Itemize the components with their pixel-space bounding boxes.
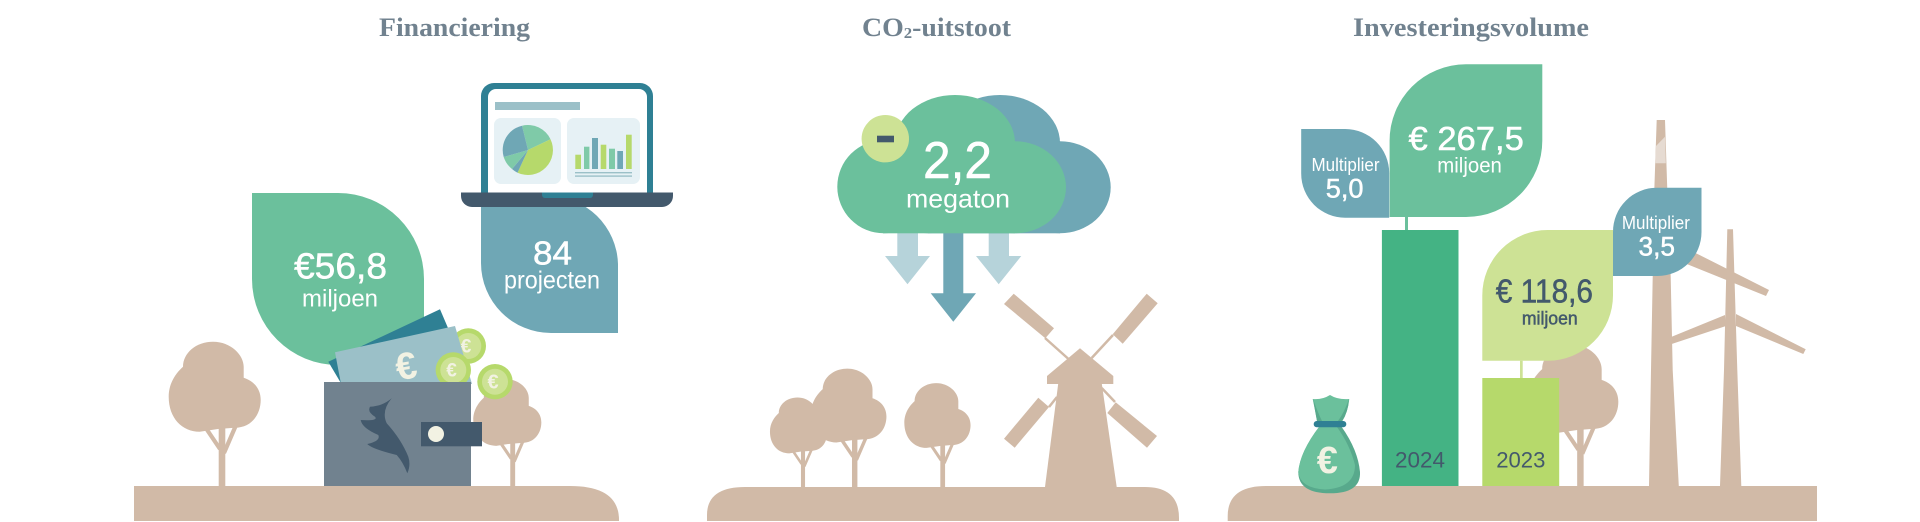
icon: banknote front: € <box>392 344 420 390</box>
arrow: centre <box>931 233 976 322</box>
bar: 2024 <box>1382 230 1458 486</box>
icon: money bag: € <box>1317 440 1338 482</box>
bar: 2024: 2024 <box>1395 448 1445 473</box>
icon: coin back: € <box>461 336 472 358</box>
leaf: 2024 amount <box>1390 64 1542 217</box>
ground <box>1228 486 1817 521</box>
text: number of projects: 84 <box>533 234 572 271</box>
text: multiplier 3,5: 3,5 <box>1638 232 1675 262</box>
text: 2024 amount: miljoen <box>1437 155 1502 178</box>
icon: banknote front <box>335 326 472 390</box>
text: financing amount <box>294 245 387 313</box>
icon: money bag <box>1298 395 1360 493</box>
icon: tree A <box>770 398 827 487</box>
icon: wallet <box>324 382 471 486</box>
leaf: financing amount <box>252 193 424 365</box>
ground <box>134 486 619 521</box>
chart: bars <box>575 135 632 177</box>
text: number of projects: projecten <box>504 266 600 294</box>
icon: coin middle: € <box>446 360 457 382</box>
panel: CO2-uitstoot <box>707 10 1179 521</box>
leaf: multiplier 3,5 <box>1613 188 1702 276</box>
stem: 2023 <box>1520 361 1523 378</box>
text: 2024 amount: € 267,5 <box>1408 120 1524 157</box>
icon: minus badge <box>862 115 909 162</box>
arrow: right <box>976 233 1021 284</box>
text: multiplier 5,0: Multiplier <box>1312 154 1380 175</box>
icon: coin front <box>477 364 513 399</box>
icon: tree C <box>904 383 971 487</box>
heading: CO2-uitstoot: ₂ <box>904 10 912 39</box>
stem: 2024 <box>1405 217 1408 230</box>
text: multiplier 5,0 <box>1312 154 1380 203</box>
icon: front cloud <box>837 95 1066 233</box>
heading: CO2-uitstoot: CO <box>862 13 901 42</box>
text: multiplier 5,0: 5,0 <box>1326 173 1364 203</box>
text: 2023 amount: € 118,6 <box>1496 273 1593 310</box>
icon: coin front: € <box>487 372 499 394</box>
icon: tree behind bar <box>1528 345 1618 486</box>
text: multiplier 3,5 <box>1622 212 1690 262</box>
leaf: number of projects <box>481 196 618 333</box>
heading: Investeringsvolume: Investeringsvolume <box>1353 13 1589 42</box>
icon: laptop with dashboard <box>461 83 673 207</box>
bar: 2023: 2023 <box>1496 448 1545 473</box>
icon: large tree <box>169 342 261 486</box>
text: CO2 reduction <box>906 132 1010 214</box>
text: 2023 amount <box>1496 273 1593 328</box>
ground <box>707 487 1179 521</box>
leaf: 2023 amount <box>1482 230 1613 361</box>
text: multiplier 3,5: Multiplier <box>1622 212 1690 233</box>
text: financing amount: €56,8 <box>294 245 387 286</box>
heading: CO2-uitstoot: -uitstoot <box>912 13 1011 42</box>
bar: 2023 <box>1482 378 1559 486</box>
icon: windmill <box>1004 294 1158 487</box>
text: CO2 reduction: megaton <box>906 184 1010 214</box>
panel: Financiering <box>134 13 673 521</box>
panel: Investeringsvolume <box>1228 13 1817 521</box>
text: number of projects <box>504 234 600 294</box>
leaf: multiplier 5,0 <box>1301 129 1389 218</box>
heading: Financiering: Financiering <box>379 13 530 42</box>
icon: tree B <box>811 369 886 487</box>
icon: small tree <box>473 379 541 486</box>
icon: banknote back <box>328 309 448 390</box>
text: 2023 amount: miljoen <box>1522 308 1578 328</box>
icon: wind turbines <box>1649 120 1806 486</box>
arrow: left <box>885 233 930 284</box>
icon: coin middle <box>436 352 471 388</box>
icon: coin back <box>451 328 486 364</box>
text: 2024 amount <box>1408 120 1524 178</box>
icon: wallet clasp <box>421 422 482 446</box>
text: financing amount: miljoen <box>302 286 378 313</box>
icon: back cloud <box>881 95 1111 233</box>
chart: pie <box>503 125 553 175</box>
text: CO2 reduction: 2,2 <box>923 132 992 190</box>
